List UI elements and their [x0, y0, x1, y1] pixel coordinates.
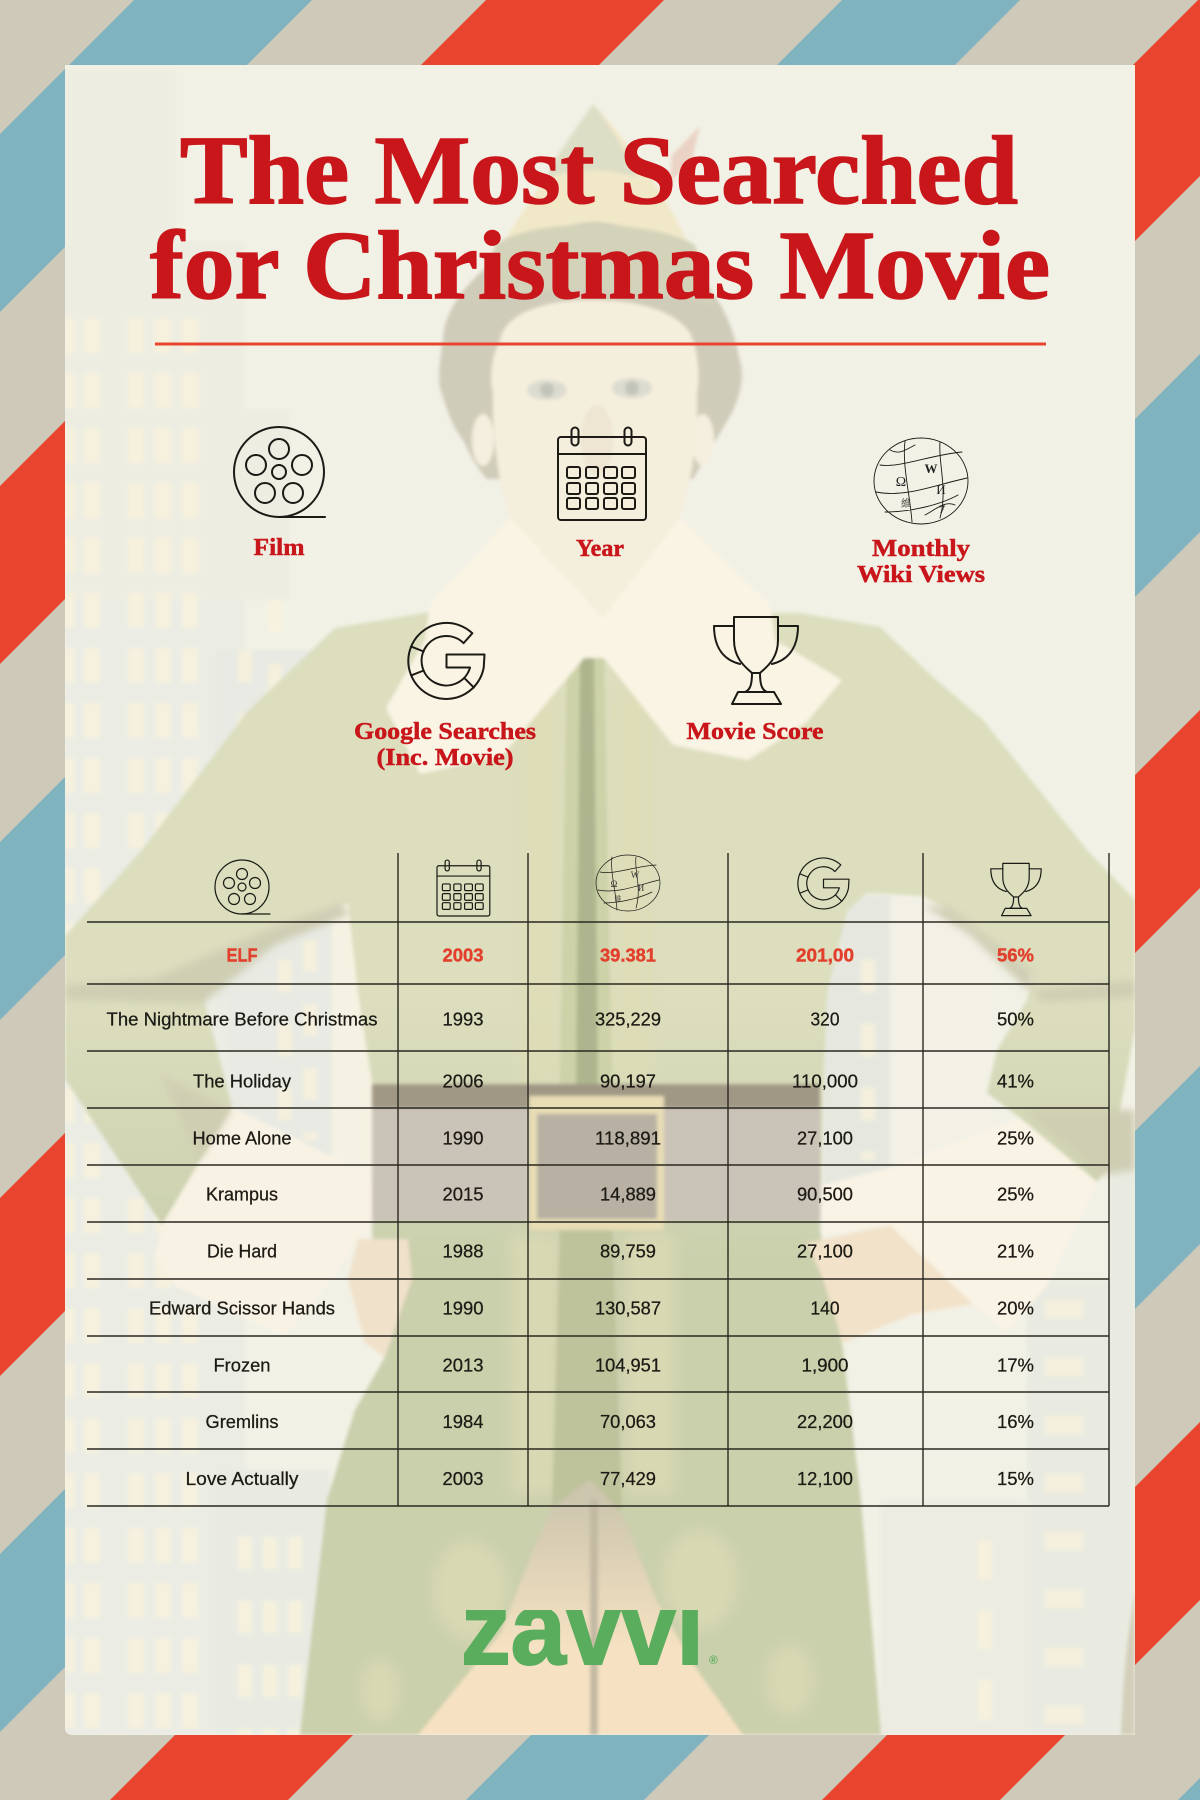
icon: wikipedia globe	[596, 855, 660, 911]
highlighted row: ELF: 56%	[997, 946, 1034, 966]
icon: wikipedia globe: И	[638, 883, 645, 893]
icon: wikipedia globe: 維	[614, 894, 622, 903]
icon: wikipedia globe: W	[631, 870, 640, 880]
row: Home Alone: 25%	[997, 1128, 1034, 1148]
row: The Holiday	[193, 1072, 1034, 1092]
highlighted row: ELF: ELF	[226, 946, 258, 966]
row: Krampus: 2015	[442, 1184, 484, 1204]
row: Frozen	[214, 1356, 1034, 1376]
row: Krampus: Krampus	[206, 1184, 278, 1204]
row: The Holiday: 110,000	[792, 1072, 858, 1092]
icon: wikipedia globe: 維	[901, 497, 911, 510]
legend: Monthly Wiki Views	[857, 438, 985, 588]
icon: trophy	[991, 863, 1041, 916]
row: Gremlins: 16%	[997, 1412, 1034, 1432]
icon: film reel	[234, 427, 325, 517]
row: The Nightmare Before Christmas: 325,229	[595, 1010, 661, 1030]
row: Edward Scissor Hands: 1990	[442, 1298, 484, 1318]
row: The Holiday: 2006	[442, 1072, 484, 1092]
highlighted row: ELF: 201,00	[796, 946, 854, 966]
legend: Monthly Wiki Views: Wiki Views	[857, 562, 985, 588]
row: The Nightmare Before Christmas: 320	[810, 1010, 840, 1030]
icon: wikipedia globe: 7	[939, 502, 945, 516]
highlighted row: ELF	[226, 946, 1034, 966]
row: Die Hard: 21%	[997, 1242, 1034, 1262]
row: Home Alone: 27,100	[797, 1128, 853, 1148]
zavvi logo	[464, 1610, 718, 1666]
data table	[87, 853, 1109, 1506]
row: Krampus: 14,889	[600, 1184, 656, 1204]
highlighted row: ELF: 39.381	[600, 946, 656, 966]
table header icons	[215, 855, 1041, 916]
row: Love Actually: 77,429	[600, 1469, 656, 1489]
icon: google G	[798, 858, 849, 909]
row: Die Hard: 27,100	[797, 1242, 853, 1262]
legend: Monthly Wiki Views: Monthly	[872, 536, 970, 562]
cuffs and hands	[155, 1107, 1097, 1357]
hat brim trim over the hair	[492, 226, 698, 270]
row: Die Hard: Die Hard	[207, 1242, 277, 1262]
row: The Holiday: The Holiday	[193, 1072, 291, 1092]
title: for Christmas Movie	[150, 212, 1050, 320]
icon: wikipedia globe	[874, 438, 968, 524]
row: Love Actually: 2003	[442, 1469, 484, 1489]
highlighted row: ELF: 2003	[442, 946, 484, 966]
row: Die Hard: 1988	[442, 1242, 484, 1262]
tights visible between coat flaps	[418, 1480, 743, 1735]
row: Gremlins: 70,063	[600, 1412, 656, 1432]
row: Frozen: 2013	[442, 1356, 484, 1376]
row: Frozen: 1,900	[802, 1356, 848, 1376]
row: The Nightmare Before Christmas	[106, 1010, 1034, 1030]
row: Home Alone: Home Alone	[192, 1128, 292, 1148]
background buildings	[68, 320, 1135, 1735]
row: Gremlins: 22,200	[797, 1412, 853, 1432]
legend: Movie Score	[686, 617, 824, 745]
legend: Year: Year	[576, 536, 624, 562]
row: The Nightmare Before Christmas: 1993	[442, 1010, 484, 1030]
legend: Google Searches	[354, 623, 536, 771]
row: Krampus: 90,500	[797, 1184, 853, 1204]
coat ornament	[362, 1236, 812, 1718]
title	[150, 117, 1050, 320]
row: Die Hard	[207, 1242, 1034, 1262]
legend: Year	[558, 428, 646, 562]
row: Home Alone: 118,891	[595, 1128, 661, 1148]
row: Krampus	[206, 1184, 1034, 1204]
icon: calendar	[437, 860, 490, 916]
hair	[439, 222, 742, 479]
row: Edward Scissor Hands: 140	[810, 1298, 840, 1318]
row: Frozen: 104,951	[595, 1356, 661, 1376]
icon: calendar	[558, 428, 646, 520]
title: The Most Searched	[180, 117, 1018, 225]
row: The Nightmare Before Christmas: The Nightmare Before Christmas	[106, 1010, 378, 1030]
row: Edward Scissor Hands	[149, 1298, 1034, 1318]
zavvi logo: ®	[709, 1653, 718, 1667]
row: The Holiday: 90,197	[600, 1072, 656, 1092]
legend: Google Searches: Google Searches	[354, 719, 536, 745]
row: Gremlins: Gremlins	[206, 1412, 278, 1432]
title rule	[155, 342, 1046, 346]
legend: Movie Score: Movie Score	[686, 719, 824, 745]
row: Home Alone	[192, 1128, 1034, 1148]
icon: trophy	[714, 617, 798, 704]
legend: Film	[234, 427, 325, 561]
row: Edward Scissor Hands: Edward Scissor Hands	[149, 1298, 335, 1318]
sleeve creases	[65, 903, 1135, 1175]
row: Die Hard: 89,759	[600, 1242, 656, 1262]
coat	[65, 612, 1135, 1735]
belt	[372, 1084, 820, 1230]
row: Love Actually: Love Actually	[186, 1469, 298, 1489]
row: Edward Scissor Hands: 20%	[997, 1298, 1034, 1318]
legend: Film: Film	[254, 535, 304, 561]
face	[470, 299, 716, 518]
row: Home Alone: 1990	[442, 1128, 484, 1148]
row: Krampus: 25%	[997, 1184, 1034, 1204]
icon: wikipedia globe: Ω	[896, 475, 906, 490]
zavvi logo: zavvi	[461, 1571, 704, 1687]
icon: google G	[408, 623, 484, 699]
row: The Holiday: 41%	[997, 1072, 1034, 1092]
icon: wikipedia globe: И	[936, 482, 946, 497]
row: Frozen: 17%	[997, 1356, 1034, 1376]
white fur collar	[385, 609, 842, 775]
row: The Nightmare Before Christmas: 50%	[997, 1010, 1034, 1030]
icon: film reel	[215, 860, 270, 914]
hat	[500, 104, 700, 248]
icon: wikipedia globe: W	[924, 461, 938, 476]
row: Edward Scissor Hands: 130,587	[595, 1298, 661, 1318]
coat placket	[560, 655, 612, 1085]
legend: Google Searches: (Inc. Movie)	[376, 745, 514, 771]
row: Love Actually: 12,100	[797, 1469, 853, 1489]
row: Gremlins: 1984	[442, 1412, 484, 1432]
row: Love Actually: 15%	[997, 1469, 1034, 1489]
row: Love Actually	[186, 1469, 1034, 1489]
table grid	[87, 853, 1109, 1506]
row: Gremlins	[206, 1412, 1034, 1432]
icon: wikipedia globe: Ω	[611, 879, 618, 889]
row: Frozen: Frozen	[214, 1356, 270, 1376]
